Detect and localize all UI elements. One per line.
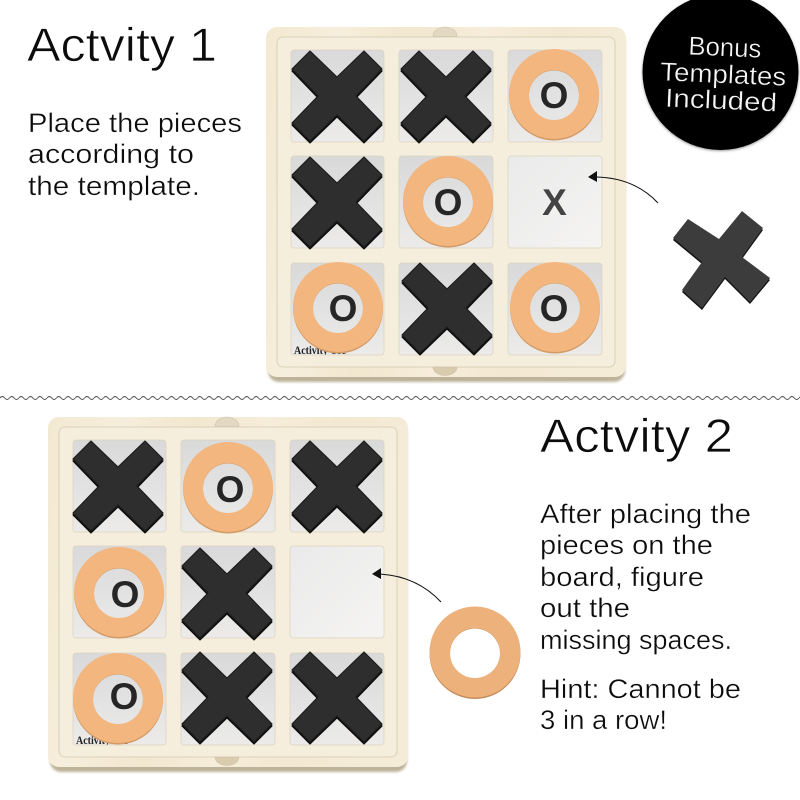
panel: Activity 2 board [48, 417, 408, 772]
text block: Activity 1 instructions: according to [28, 139, 194, 169]
piece: X row 1 column 2 [401, 51, 491, 143]
text block: Activity 1 instructions: Place the pieces [28, 108, 242, 138]
title: Activity 2 heading: Actvity 2 [540, 409, 733, 462]
piece: O row 3 column 1 [293, 262, 383, 354]
piece: X row 1 column 1 [292, 51, 382, 143]
text block: Activity 2 instructions: After placing the [540, 499, 751, 529]
icon: loose X piece [673, 211, 770, 310]
piece: O row 3 column 1 [73, 653, 163, 744]
piece: O row 2 column 2 [403, 156, 493, 248]
board frame and cells [48, 417, 408, 772]
piece: X row 2 column 2 [182, 548, 272, 640]
panel: Activity 1 board [266, 27, 626, 382]
cell letters O: O [110, 676, 138, 717]
text block: hint: 3 in a row! [540, 705, 667, 735]
empty cell letter X: X [542, 182, 567, 223]
text block: Activity 2 instructions: missing spaces. [540, 625, 732, 655]
text block: Activity 1 instructions: the template. [28, 171, 200, 201]
callout: Bonus Templates Included badge: Templates [660, 56, 787, 92]
piece: O row 2 column 1 [74, 547, 164, 638]
board brand label: Activity Use [294, 345, 346, 357]
icon: loose O piece [430, 606, 520, 699]
wavy divider [0, 393, 800, 403]
piece: X row 1 column 3 [292, 441, 382, 533]
callout: Bonus Templates Included badge: Bonus [688, 31, 762, 64]
piece: X row 2 column 1 [292, 157, 382, 249]
text block: Activity 1 instructions [28, 108, 242, 201]
arrow: loose O to empty cell [372, 568, 441, 602]
piece: O row 1 column 2 [183, 442, 273, 534]
text block: Activity 2 instructions: out the [540, 593, 630, 623]
board brand label: Activity Use [76, 735, 128, 747]
text block: hint: Hint: Cannot be [540, 674, 741, 704]
board frame and cells [266, 27, 626, 382]
piece: X row 1 column 1 [73, 441, 163, 533]
cell letters O: O [329, 288, 357, 329]
cell letters O [329, 75, 568, 329]
title: Activity 1 heading: Actvity 1 [27, 18, 217, 71]
piece: O row 3 column 3 [510, 262, 600, 354]
cell letters O: O [540, 75, 568, 116]
cell letters O [110, 469, 244, 717]
piece: X row 3 column 2 [402, 263, 492, 355]
callout: Bonus Templates Included badge: Included [665, 83, 778, 117]
piece: O row 1 column 3 [509, 49, 599, 140]
text block: hint [540, 674, 741, 735]
cell letters O: O [216, 469, 244, 510]
piece: X row 3 column 2 [182, 652, 272, 744]
cell letters O: O [434, 182, 462, 223]
text block: Activity 2 instructions [540, 499, 751, 655]
cell letters O: O [540, 288, 568, 329]
callout: Bonus Templates Included badge [642, 0, 798, 151]
piece: X row 3 column 3 [292, 652, 382, 744]
cell letters O: O [111, 574, 139, 615]
text block: Activity 2 instructions: pieces on the [540, 530, 713, 560]
text block: Activity 2 instructions: board, figure [540, 562, 704, 592]
arrow: loose X to empty cell [588, 171, 658, 203]
